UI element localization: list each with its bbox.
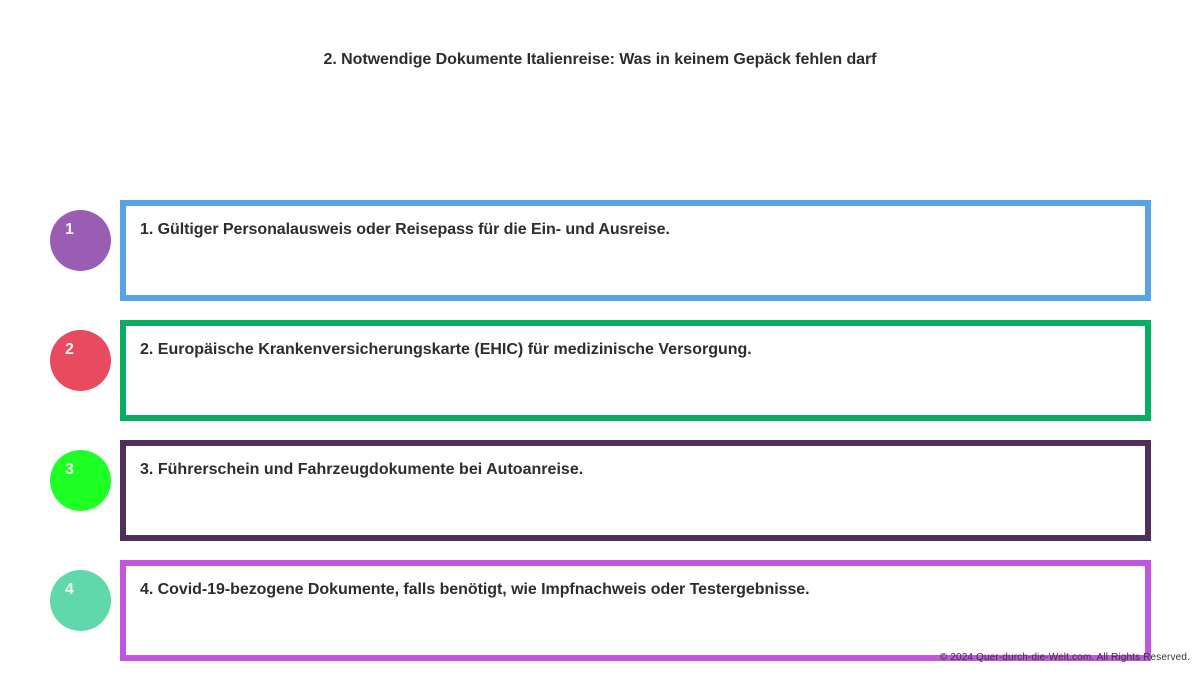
number 1: 1 [65,221,74,238]
violet framed box [120,560,1151,661]
number 2: 2 [65,341,74,358]
panel: item 1 [50,200,1151,301]
number 3: 3 [65,461,74,478]
icon: mint number circle [50,570,111,631]
panel: item 3 [50,440,1151,541]
title: 2. Notwendige Dokumente Italienreise: Was in keinem Gepäck fehlen darf [324,51,876,68]
text: item 1: 1. Gültiger Personalausweis oder Reisepass für die Ein- und Ausreise. [140,221,670,238]
dark purple framed box [120,440,1151,541]
icon: green number circle [50,450,111,511]
icon: purple number circle [50,210,111,271]
text: item 2: 2. Europäische Krankenversicherungskarte (EHIC) für medizinische Versorgung. [140,341,752,358]
panel: item 4 [50,560,1151,661]
icon: red number circle [50,330,111,391]
footer copyright: © 2024 Quer-durch-die-Welt.com. All Rights Reserved. [940,652,1190,663]
green framed box [120,320,1151,421]
blue framed box [120,200,1151,301]
text: item 3: 3. Führerschein und Fahrzeugdokumente bei Autoanreise. [140,461,583,478]
panel: item 2 [50,320,1151,421]
text: item 4: 4. Covid-19-bezogene Dokumente, falls benötigt, wie Impfnachweis oder Testergebnisse. [140,581,810,598]
number 4: 4 [65,581,74,598]
